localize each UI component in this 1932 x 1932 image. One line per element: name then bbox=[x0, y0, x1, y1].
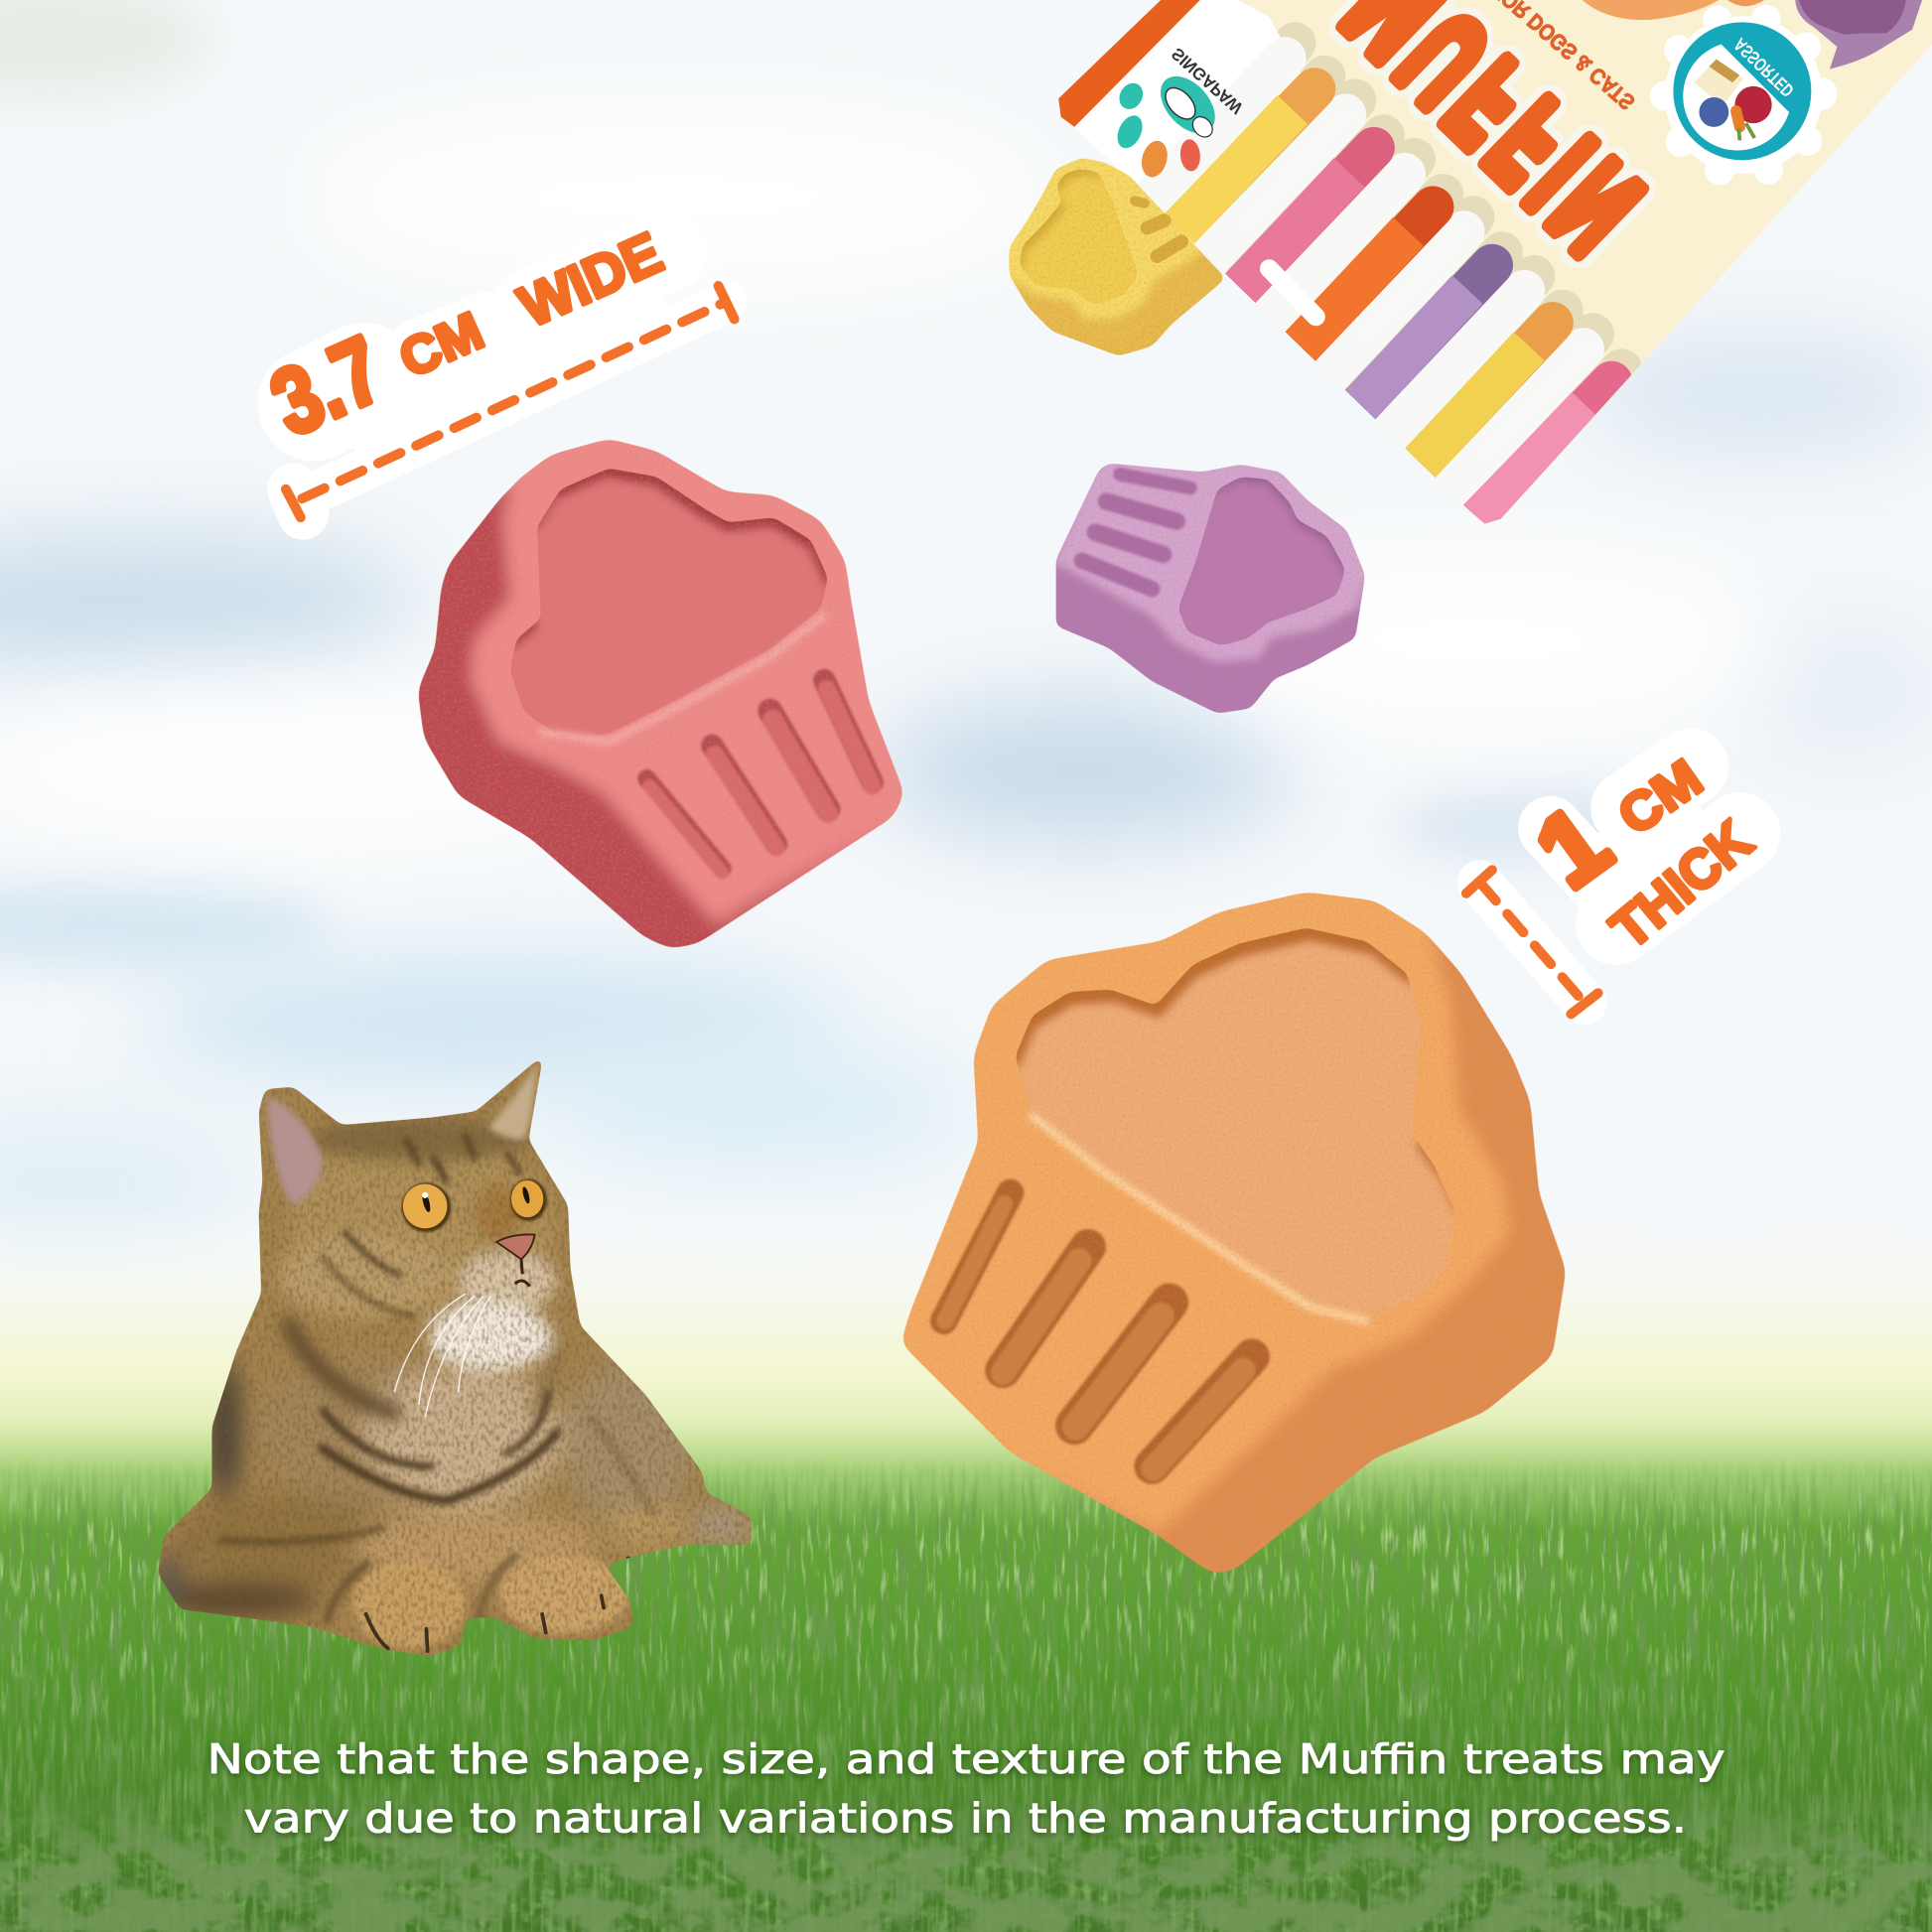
white stripes bbox=[1144, 58, 1584, 505]
cat whiskers bbox=[394, 1294, 490, 1417]
dimension callout: 1 cm thick bbox=[1466, 749, 1763, 1014]
grass field bbox=[0, 1417, 1932, 1932]
recess highlight bbox=[1033, 1116, 1366, 1320]
label WIDE: WIDE bbox=[510, 220, 671, 340]
assorted flavour badge: ASSORTED bbox=[1729, 34, 1798, 101]
muffin treat: purple bbox=[1056, 464, 1365, 714]
hang slot bbox=[1269, 269, 1315, 317]
cat nose and mouth bbox=[496, 1234, 535, 1287]
muffin treat: red bbox=[418, 439, 904, 949]
head colours bbox=[290, 1135, 556, 1317]
red muffin grooves bbox=[647, 680, 873, 873]
fur grain bbox=[136, 1035, 776, 1676]
white label panel bbox=[1074, 0, 1301, 185]
label CM: CM bbox=[391, 302, 491, 389]
dimension callout: 3.7 cm wide bbox=[256, 220, 735, 517]
muffin treat: yellow bbox=[1009, 158, 1226, 356]
muffin treat cut off at top, small orange piece bbox=[1727, 0, 1764, 6]
assorted flavour badge bbox=[1665, 16, 1823, 174]
cat eye right bbox=[510, 1179, 547, 1221]
note line 2: vary due to natural variations in the manufacturing process. bbox=[244, 1794, 1687, 1842]
orange muffin grooves bbox=[944, 1192, 1252, 1468]
measurement line bbox=[286, 286, 735, 517]
label 3.7: 3.7 bbox=[256, 317, 398, 456]
packaging: Muffin pouch, mirrored and rotated bbox=[1047, 0, 1932, 543]
tabby cat looking up bbox=[136, 1035, 776, 1676]
disclaimer note bbox=[207, 1735, 1725, 1842]
clear window sheen bbox=[1244, 113, 1589, 456]
muffin treat cut off at top, orange bbox=[1583, 0, 1719, 20]
white sticker halo bbox=[1480, 766, 1739, 1003]
brand logo bbox=[1113, 44, 1247, 180]
neck and chest shadow bbox=[286, 1318, 400, 1415]
recess highlight bbox=[542, 617, 823, 742]
scalloped stripe shadows bbox=[1152, 43, 1621, 517]
label 1: 1 bbox=[1517, 784, 1629, 909]
label CM: CM bbox=[1608, 749, 1713, 847]
tabby stripes bbox=[221, 1136, 653, 1542]
cat eye left bbox=[402, 1182, 451, 1232]
measurement line bbox=[1466, 870, 1598, 1014]
pouch body bbox=[1058, 0, 1932, 422]
white sticker halo bbox=[293, 252, 726, 514]
coloured stripes: main bands bbox=[1159, 109, 1587, 543]
ear inner bbox=[266, 1097, 323, 1205]
orange edge band bbox=[1058, 0, 1200, 127]
toe lines bbox=[366, 1559, 629, 1651]
muffin treat: orange bbox=[900, 893, 1566, 1574]
fore paws bbox=[352, 1560, 466, 1649]
brand logo: SINGAPAW bbox=[1168, 44, 1247, 118]
muffin treat cut off at top, purple bbox=[1795, 0, 1922, 69]
body and haunch colours bbox=[207, 1358, 241, 1501]
coloured stripes: caps bbox=[1169, 88, 1611, 532]
label THICK: THICK bbox=[1598, 808, 1763, 960]
note line 1: Note that the shape, size, and texture of the Muffin treats may bbox=[207, 1735, 1725, 1783]
